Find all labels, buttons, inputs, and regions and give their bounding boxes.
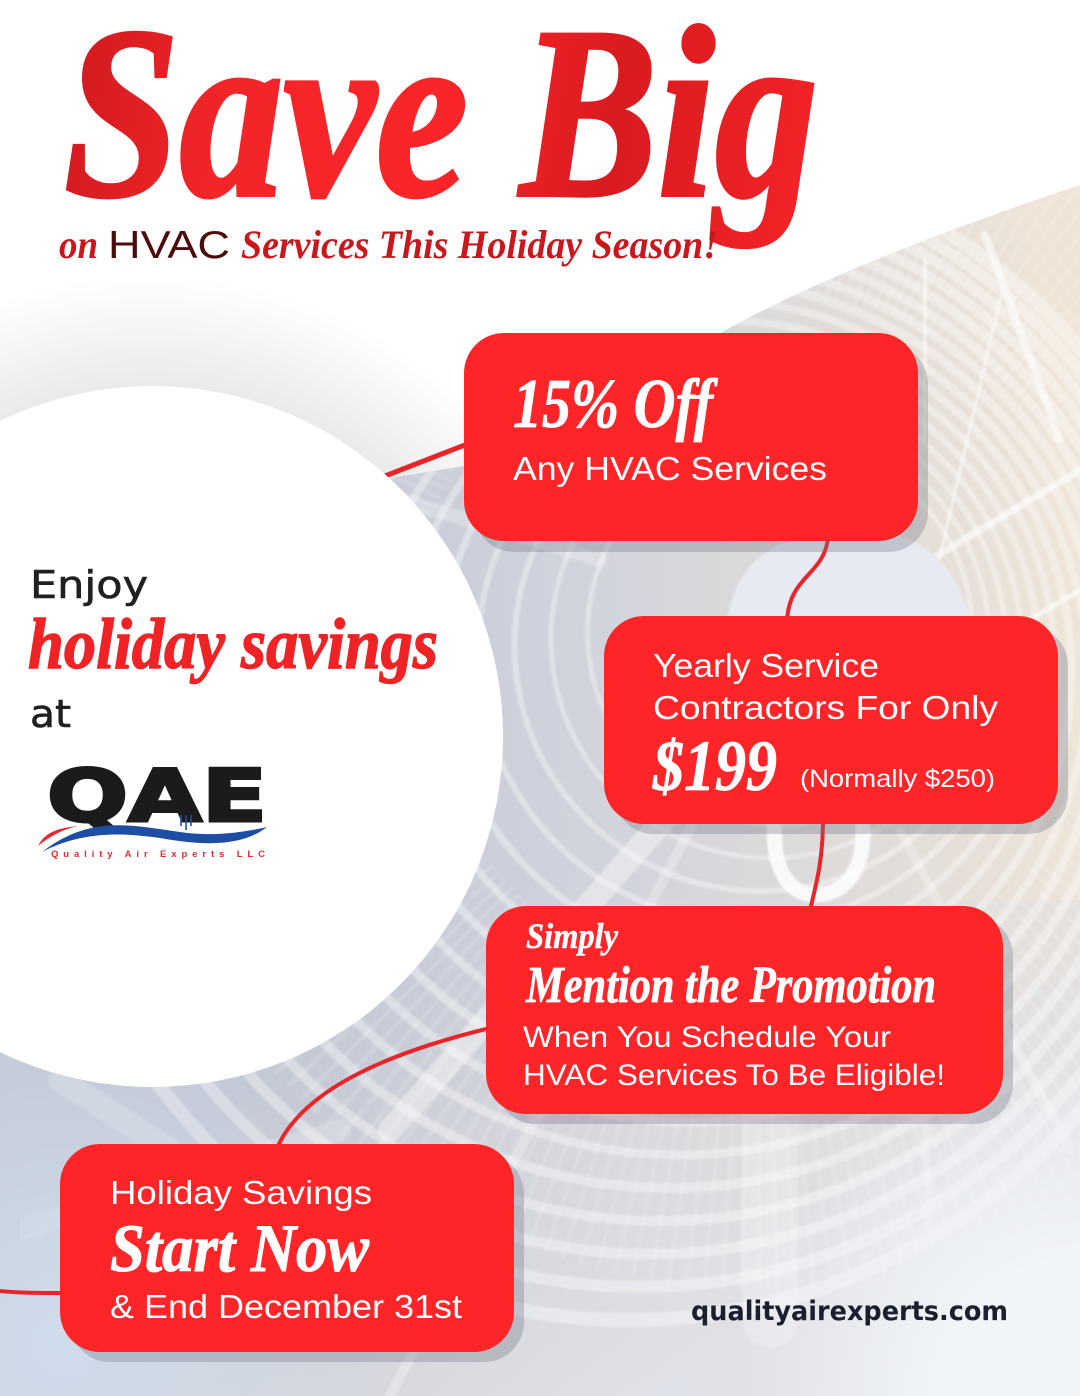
grey haze around circle: [0, 250, 620, 650]
title: Save Big: [64, 0, 818, 248]
logo tagline: Quality Air Experts LLC: [51, 849, 265, 860]
connector lines: [0, 443, 828, 1293]
subtitle: [59, 222, 718, 267]
logo: Quality Air Experts: QAE: [47, 754, 267, 838]
subtitle: HVAC: [108, 224, 230, 267]
white circle panel: [0, 386, 503, 1087]
holiday savings text: Holiday Savings: [110, 1174, 372, 1211]
price: $199: [652, 726, 777, 806]
eligibility text: When You Schedule Your: [523, 1021, 891, 1054]
promotion headline: Mention the Promotion: [525, 957, 936, 1014]
logo swoosh: red: [38, 826, 78, 846]
website url: qualityairexperts.com: [691, 1296, 1008, 1327]
fan handle: [774, 815, 863, 895]
panel: yearly service contractors: [604, 616, 1068, 834]
panel: start now: [60, 1144, 524, 1362]
text: holiday savings: holiday savings: [28, 604, 438, 684]
panel: mention the promotion: [486, 906, 1013, 1124]
subtitle: Services This Holiday Season!: [241, 222, 718, 267]
logo: Quality Air Experts: [38, 754, 267, 860]
fan hub: [728, 536, 970, 616]
logo swoosh: blue: [42, 825, 267, 852]
fan guard rings: [152, 229, 1080, 1326]
normal price: (Normally $250): [800, 765, 995, 793]
end date: & End December 31st: [110, 1288, 462, 1325]
start now: Start Now: [110, 1210, 370, 1286]
text: Enjoy: Enjoy: [30, 563, 148, 607]
logo vent mark: [181, 815, 191, 830]
offer headline: 15% Off: [513, 366, 719, 443]
panel: mention the promotion: HVAC Services To Be Eligible!: [523, 1059, 945, 1092]
text: at: at: [30, 692, 71, 736]
offer detail: Any HVAC Services: [513, 450, 827, 487]
service text: Yearly Service: [653, 647, 879, 684]
panel: 15% off: [464, 333, 928, 552]
simply: Simply: [526, 916, 619, 956]
panel: yearly service contractors: Contractors For Only: [653, 689, 999, 726]
subtitle: on: [59, 222, 98, 267]
